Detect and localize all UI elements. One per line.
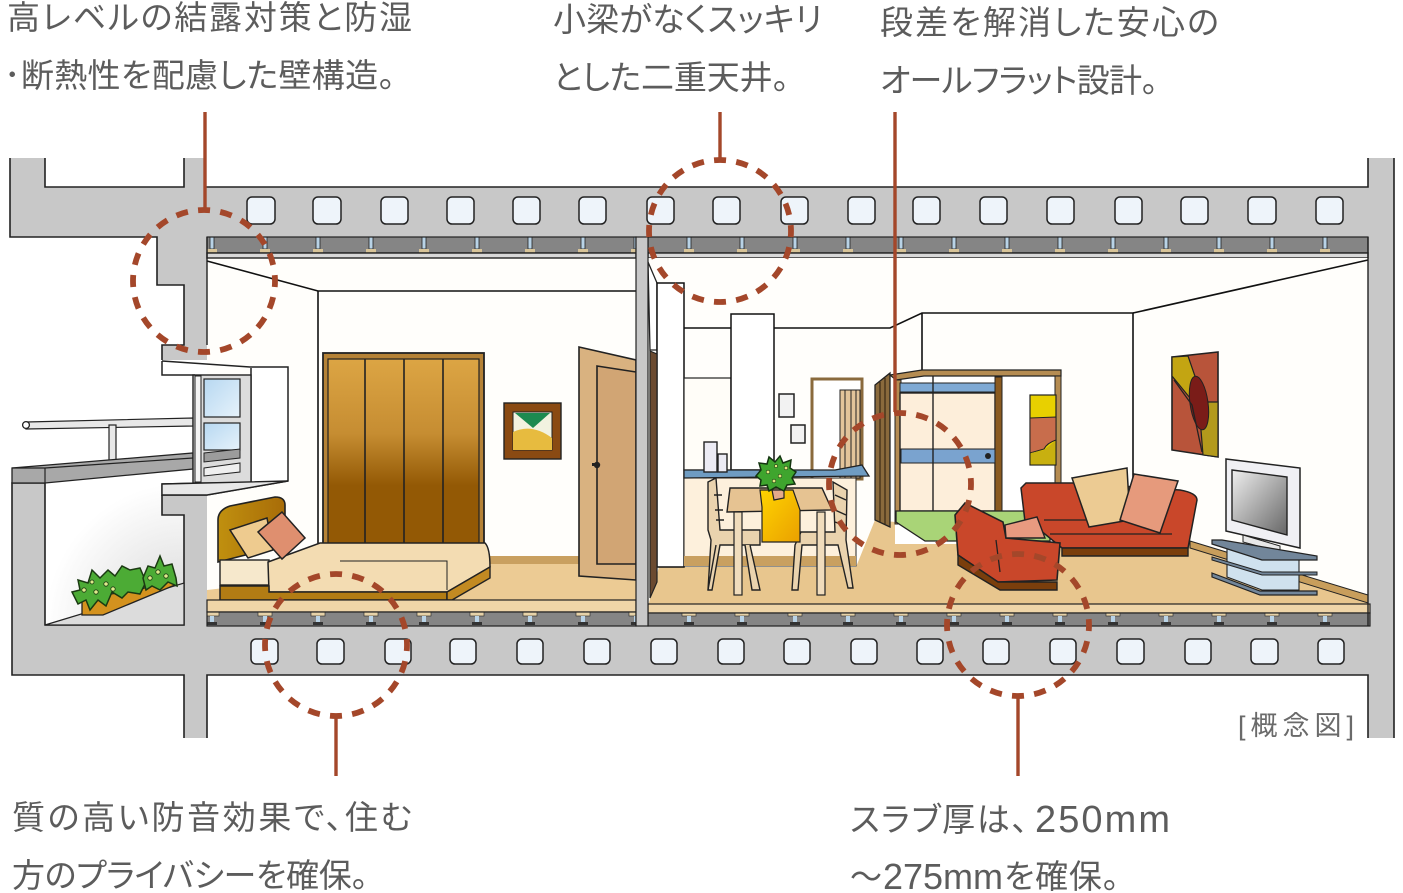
- sliding partition: [875, 373, 890, 527]
- caption: soundproofing: 質の高い防音効果で、住む: [12, 799, 412, 836]
- balcony planter: [72, 556, 177, 615]
- caption: double ceiling: とした二重天井。: [553, 59, 789, 96]
- dashed circles: [133, 160, 1089, 716]
- kitchen column and walls: [684, 314, 774, 470]
- leader lines: [205, 112, 1018, 776]
- caption: soundproofing: [12, 799, 412, 893]
- caption: slab thickness: 250mm: [1035, 799, 1170, 841]
- partition column: [648, 262, 684, 598]
- caption: all-flat design: オールフラット設計。: [880, 62, 1158, 99]
- balcony handrail: [23, 418, 193, 461]
- balcony floor: [45, 583, 184, 625]
- living floor boards: [648, 604, 1370, 626]
- room outline: [207, 237, 1368, 626]
- tv: [1226, 459, 1300, 552]
- top slab hollow voids: [247, 197, 1343, 224]
- balcony parapet: [12, 453, 193, 483]
- hall door opening: [812, 379, 862, 479]
- ceiling plenum right: [648, 237, 1368, 258]
- caption: slab thickness: スラブ厚は、: [850, 801, 1028, 838]
- wall pictures: [779, 394, 805, 443]
- bedroom interior: [207, 258, 636, 603]
- caption: high-level condensation-proof wall: 高レベルの結露対策と防湿: [7, 0, 412, 36]
- dining chairs: [708, 478, 853, 590]
- alcove hanging art: [1030, 395, 1056, 465]
- bedroom door: [579, 347, 636, 580]
- caption: soundproofing: 方のプライバシーを確保。: [12, 857, 368, 893]
- tv stand: [1212, 540, 1317, 595]
- caption: high-level condensation-proof wall: [4, 0, 412, 94]
- table plant: [756, 456, 796, 491]
- bedroom floor boards: [207, 600, 636, 626]
- ceiling plenum left: [207, 237, 636, 258]
- living room wall art: [1172, 352, 1218, 457]
- caption: high-level condensation-proof wall: ･断熱性を配慮した壁構造。: [4, 57, 395, 94]
- kitchen counter: [684, 442, 869, 566]
- sofa: [1021, 468, 1197, 556]
- caption: slab thickness: [850, 799, 1170, 893]
- framed picture: [504, 403, 561, 459]
- balcony recess shading: [45, 483, 184, 625]
- japanese room with shoji: [890, 370, 1061, 544]
- concrete building section: [10, 158, 1394, 738]
- living room interior: [648, 258, 1368, 608]
- party wall: [636, 237, 648, 626]
- wardrobe: [323, 353, 484, 545]
- concept drawing label: [概念図]: [1238, 711, 1354, 741]
- caption: all-flat design: [880, 4, 1219, 99]
- bottom slab hollow voids: [251, 639, 1344, 664]
- bed: [218, 497, 490, 600]
- window bay: [162, 361, 288, 495]
- caption: all-flat design: 段差を解消した安心の: [880, 4, 1219, 41]
- caption: double ceiling: [553, 1, 822, 96]
- caption: double ceiling: 小梁がなくスッキリ: [553, 1, 822, 38]
- armchair: [955, 503, 1060, 590]
- dining table: [727, 488, 832, 595]
